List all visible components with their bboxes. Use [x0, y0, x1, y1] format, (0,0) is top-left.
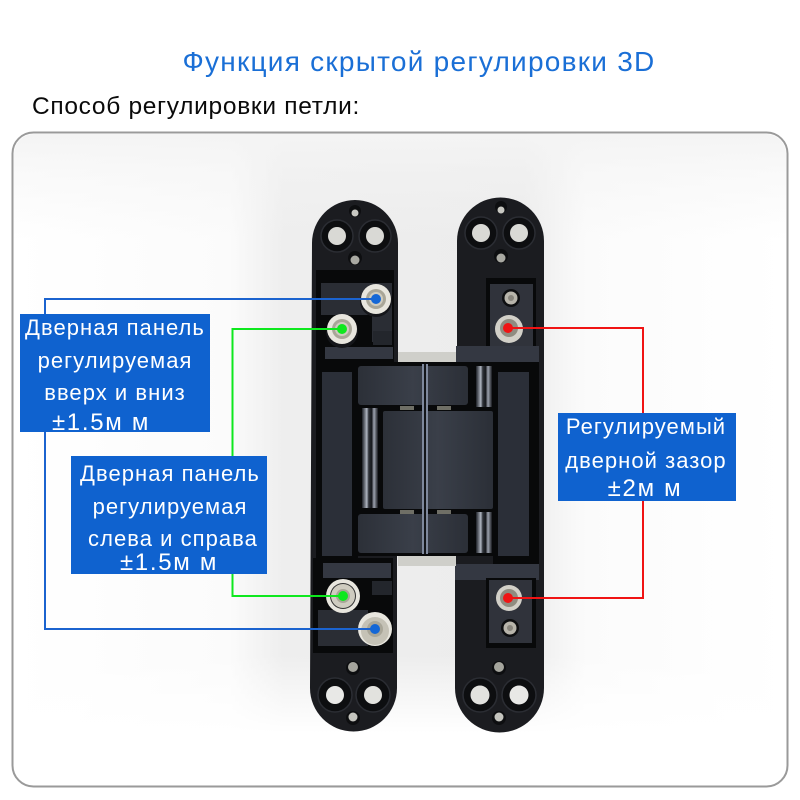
callout: door gap adjustment: дверной зазор [565, 448, 727, 473]
channel [493, 362, 539, 565]
top mounting holes [321, 205, 391, 265]
callout: left and right adjustment: слева и справа [88, 526, 258, 551]
bottom mounting holes [318, 661, 390, 725]
callout: door gap adjustment: ±2м м [608, 475, 682, 502]
panel: photo frame [12, 132, 788, 786]
callout: left and right adjustment [71, 456, 267, 576]
hinge: left plate [310, 200, 398, 732]
connector: red lines [503, 323, 643, 603]
callout: up and down adjustment: ±1.5м м [52, 409, 150, 436]
bottom mounting holes [463, 661, 536, 725]
callout: up and down adjustment [20, 314, 210, 436]
hinge: right plate [455, 198, 544, 732]
subtitle: Способ регулировки петли: [32, 93, 360, 120]
top adjustment recess [316, 270, 394, 365]
bottom adjustment recess [313, 558, 393, 653]
adjustment screws [326, 284, 523, 646]
connector: green lines [232, 324, 348, 601]
callout: up and down adjustment: вверх и вниз [44, 380, 186, 405]
callout: up and down adjustment: Дверная панель [25, 315, 205, 340]
hinge: central knuckle [352, 352, 498, 566]
callout: left and right adjustment: Дверная панель [80, 461, 260, 486]
top adjustment block [456, 278, 539, 362]
callout: door gap adjustment [558, 413, 736, 502]
callout: door gap adjustment: Регулируемый [566, 414, 726, 439]
channel [316, 365, 358, 565]
bottom adjustment block [455, 564, 539, 648]
connector: blue lines [45, 294, 381, 634]
callout: up and down adjustment: регулируемая [38, 348, 192, 373]
title: Функция скрытой регулировки 3D [182, 46, 656, 77]
callout: left and right adjustment: регулируемая [93, 494, 247, 519]
top mounting holes [465, 201, 535, 263]
callout: left and right adjustment: ±1.5м м [120, 549, 218, 576]
